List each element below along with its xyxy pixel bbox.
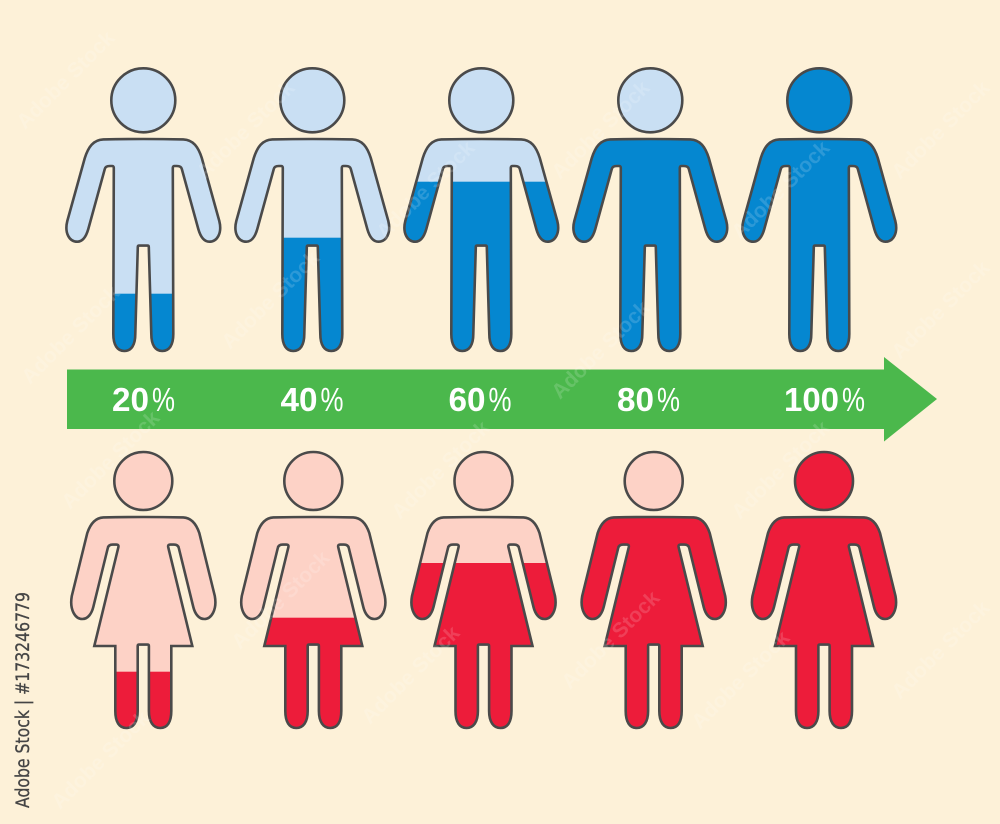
label 40% <box>280 381 344 418</box>
stock credit: Adobe Stock | #173246779 <box>13 592 34 808</box>
label 100% <box>784 381 865 418</box>
watermark pattern: Adobe Stock <box>887 596 995 704</box>
label 100%: % <box>842 381 865 418</box>
female figure 20% <box>71 452 215 742</box>
female figure 80% <box>582 452 726 728</box>
watermark pattern: Adobe Stock <box>547 296 655 404</box>
watermark pattern: Adobe Stock <box>687 626 795 734</box>
watermark pattern: Adobe Stock <box>17 281 125 389</box>
watermark pattern: Adobe Stock <box>217 246 325 354</box>
female figure 60% <box>410 450 557 730</box>
watermark pattern: Adobe Stock <box>557 586 665 694</box>
watermark pattern: Adobe Stock <box>372 136 480 244</box>
male figure 40% <box>235 68 389 364</box>
male figure 60% <box>403 67 560 352</box>
watermark pattern: Adobe Stock <box>192 76 300 184</box>
label 40%: 40 <box>280 381 318 418</box>
label 60%: % <box>488 381 512 418</box>
label 80%: 80 <box>617 381 654 418</box>
label 40%: % <box>320 381 344 418</box>
label 80%: % <box>657 381 680 418</box>
watermark pattern: Adobe Stock <box>887 256 995 364</box>
female figure 40% <box>241 452 385 742</box>
label 80% <box>617 381 680 418</box>
watermark pattern: Adobe Stock <box>887 76 995 184</box>
male figure 80% <box>573 68 727 351</box>
watermark pattern: Adobe Stock <box>12 26 120 134</box>
watermark pattern: Adobe Stock <box>47 706 155 814</box>
label 60%: 60 <box>448 381 486 418</box>
label 100%: 100 <box>784 381 839 418</box>
watermark pattern: Adobe Stock <box>357 621 465 729</box>
label 60% <box>448 381 512 418</box>
label 20%: 20 <box>112 381 149 418</box>
female figure 100% <box>752 452 896 728</box>
label 20%: % <box>152 381 175 418</box>
watermark pattern: Adobe Stock <box>227 546 335 654</box>
watermark pattern: Adobe Stock <box>547 76 655 184</box>
male figure 20% <box>66 68 220 364</box>
watermark pattern: Adobe Stock <box>387 416 495 524</box>
watermark pattern: Adobe Stock <box>727 136 835 244</box>
watermark pattern: Adobe Stock <box>57 406 165 514</box>
watermark pattern: Adobe Stock <box>727 416 835 524</box>
label 20% <box>112 381 175 418</box>
male figure 100% <box>742 68 896 351</box>
green arrow <box>67 357 937 442</box>
